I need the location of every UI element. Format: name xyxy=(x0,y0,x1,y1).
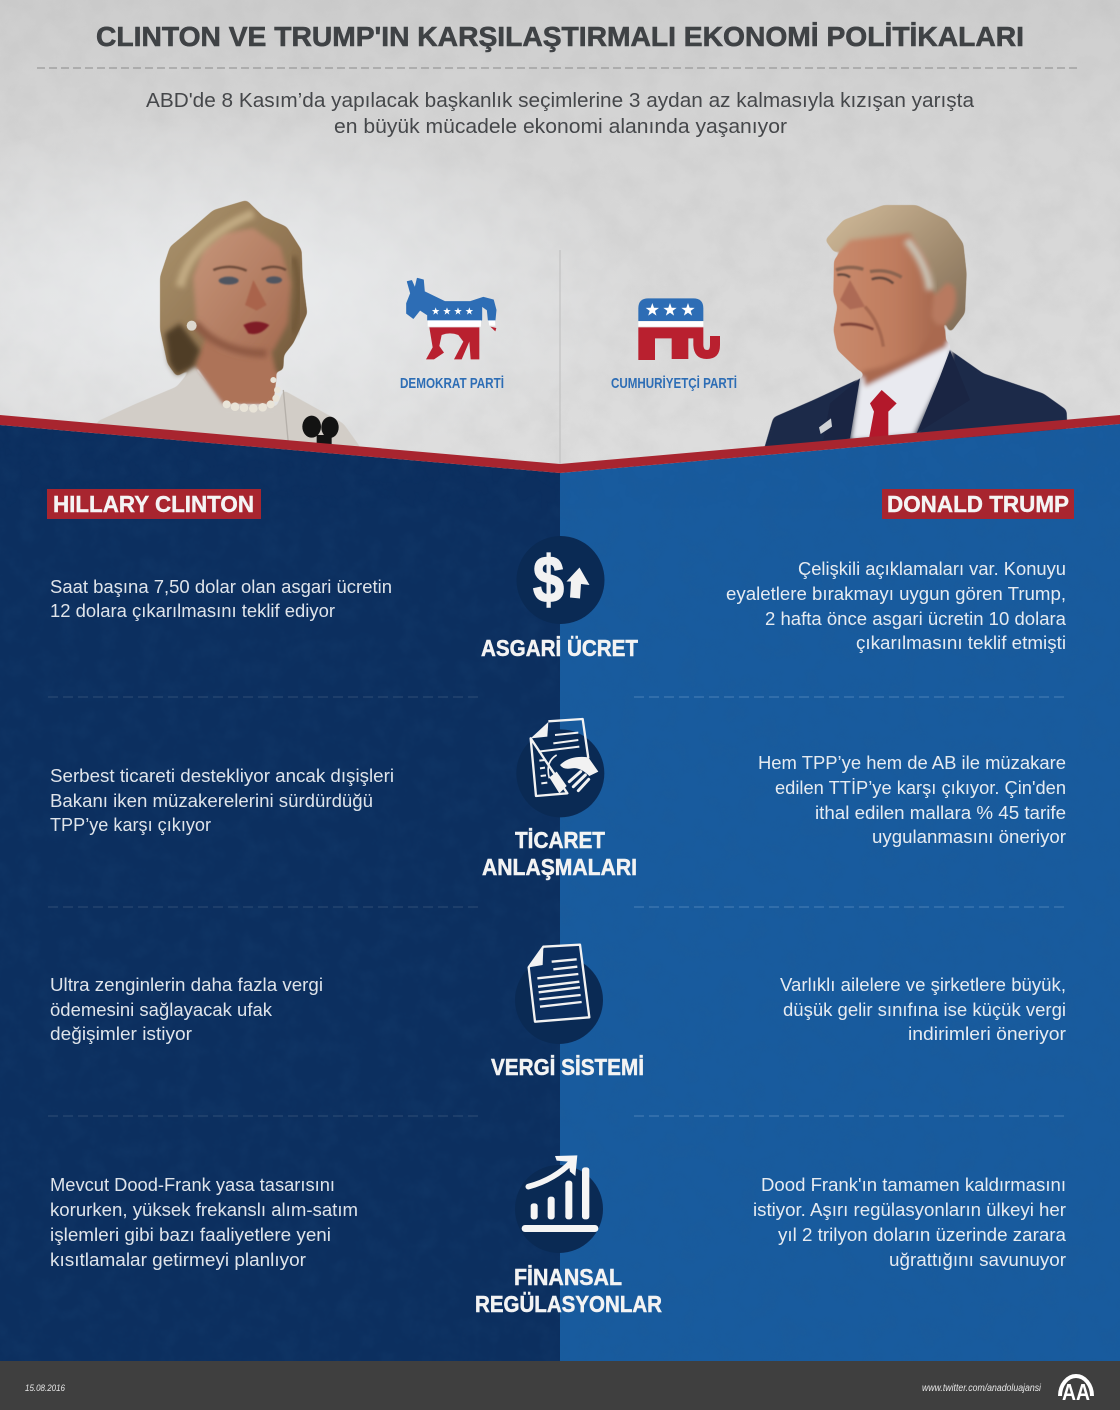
subtitle: ABD'de 8 Kasım’da yapılacak başkanlık seçimlerine 3 aydan az kalmasıyla kızışan yarışta xyxy=(146,90,975,112)
background: textured grey wall xyxy=(0,0,1120,480)
row: finansal, Trump text xyxy=(753,1175,1067,1270)
panel: Trump side xyxy=(560,420,1120,1365)
row: asgari ücret, Clinton text xyxy=(50,577,392,621)
portrait: Donald Trump xyxy=(763,205,1067,453)
footer bar xyxy=(0,1361,1120,1410)
row: vergi, Trump text: indirimleri öneriyor xyxy=(908,1024,1066,1044)
panel: Clinton side xyxy=(0,420,560,1365)
row: asgari ücret, icon xyxy=(516,536,604,624)
row: asgari ücret, heading: ASGARİ ÜCRET xyxy=(481,635,638,661)
row: finansal, Trump text: istiyor. Aşırı regülasyonların ülkeyi her xyxy=(753,1200,1066,1220)
row: asgari ücret, Trump text: eyaletlere bırakmayı uygun gören Trump, xyxy=(726,584,1066,604)
title: CLINTON VE TRUMP'IN KARŞILAŞTIRMALI EKONOMİ POLİTİKALARI xyxy=(96,21,1024,52)
row: ticaret, Clinton text: Serbest ticareti destekliyor ancak dışişleri xyxy=(50,766,394,786)
row: finansal, Clinton text xyxy=(50,1175,358,1270)
row: asgari ücret, Clinton text: 12 dolara çıkarılmasını teklif ediyor xyxy=(50,601,335,621)
date: 15.08.2016 xyxy=(25,1383,65,1393)
row: vergi, document icon xyxy=(515,945,603,1044)
name tag: Donald Trump: DONALD TRUMP xyxy=(887,491,1069,517)
row: ticaret, handshake document icon xyxy=(516,719,604,817)
source link: www.twitter.com/anadoluajansi xyxy=(922,1383,1042,1394)
row: finansal, Clinton text: korurken, yüksek frekanslı alım-satım xyxy=(50,1200,358,1220)
row: finansal, chart icon xyxy=(515,1155,603,1253)
row: ticaret, Trump text xyxy=(758,753,1066,847)
row: asgari ücret, Trump text: çıkarılmasını teklif etmişti xyxy=(856,633,1066,653)
subtitle xyxy=(146,90,975,138)
row: finansal, Clinton text: kısıtlamalar getirmeyi planlıyor xyxy=(50,1250,306,1270)
row: finansal, heading: REGÜLASYONLAR xyxy=(475,1291,662,1317)
row: ticaret, Clinton text xyxy=(50,766,394,835)
subtitle: en büyük mücadele ekonomi alanında yaşanıyor xyxy=(334,116,787,138)
row: ticaret, Trump text: edilen TTİP’ye karşı çıkıyor. Çin'den xyxy=(775,778,1066,798)
label: Cumhuriyetçi Parti: CUMHURİYETÇİ PARTİ xyxy=(611,375,737,392)
row: asgari ücret, Trump text: Çelişkili açıklamaları var. Konuyu xyxy=(798,559,1066,579)
row: vergi, Clinton text xyxy=(50,975,323,1044)
row: finansal, heading: FİNANSAL xyxy=(514,1264,622,1290)
logo: Anadolu Ajansı: AA xyxy=(1062,1379,1090,1405)
row: finansal, Clinton text: işlemleri gibi bazı faaliyetlere yeni xyxy=(50,1225,331,1245)
logo: Democratic donkey xyxy=(407,278,496,359)
row: finansal, Trump text: uğrattığını savunuyor xyxy=(889,1250,1066,1270)
row: ticaret, heading: ANLAŞMALARI xyxy=(482,854,637,880)
row: asgari ücret, icon: $ xyxy=(533,542,564,616)
logo: Republican elephant xyxy=(638,298,720,360)
portrait: Hillary Clinton xyxy=(97,200,360,467)
row: asgari ücret, Trump text: 2 hafta önce asgari ücretin 10 dolara xyxy=(765,609,1067,629)
row: vergi, Clinton text: değişimler istiyor xyxy=(50,1024,192,1044)
row: vergi, Trump text: Varlıklı ailelere ve şirketlere büyük, xyxy=(780,975,1066,995)
name tag: Hillary Clinton: HILLARY CLINTON xyxy=(53,491,254,517)
row: finansal, Clinton text: Mevcut Dood-Frank yasa tasarısını xyxy=(50,1175,335,1195)
row: finansal, Trump text: Dood Frank'ın tamamen kaldırmasını xyxy=(761,1175,1066,1195)
row: vergi, Clinton text: Ultra zenginlerin daha fazla vergi xyxy=(50,975,323,995)
row: finansal, heading xyxy=(475,1264,662,1317)
row: ticaret, heading: TİCARET xyxy=(515,827,605,853)
row: ticaret, Trump text: ithal edilen mallara % 45 tarife xyxy=(815,803,1066,823)
label: Demokrat Parti: DEMOKRAT PARTİ xyxy=(400,375,504,392)
row: ticaret, heading xyxy=(482,827,637,880)
row: ticaret, Trump text: Hem TPP’ye hem de AB ile müzakare xyxy=(758,753,1066,773)
row: ticaret, Trump text: uygulanmasını öneriyor xyxy=(872,827,1066,847)
row: finansal, Trump text: yıl 2 trilyon doların üzerinde zarara xyxy=(778,1225,1067,1245)
row: asgari ücret, Trump text xyxy=(726,559,1067,653)
row: vergi, heading: VERGİ SİSTEMİ xyxy=(491,1054,644,1080)
row: ticaret, Clinton text: TPP’ye karşı çıkıyor xyxy=(50,815,211,835)
row: vergi, Trump text xyxy=(780,975,1066,1044)
row: ticaret, Clinton text: Bakanı iken müzakerelerini sürdürdüğü xyxy=(50,791,373,811)
row: vergi, Clinton text: ödemesini sağlayacak ufak xyxy=(50,1000,273,1020)
red chevron band xyxy=(0,415,1120,473)
row: vergi, Trump text: düşük gelir sınıfına ise küçük vergi xyxy=(783,1000,1066,1020)
row: asgari ücret, Clinton text: Saat başına 7,50 dolar olan asgari ücretin xyxy=(50,577,392,597)
